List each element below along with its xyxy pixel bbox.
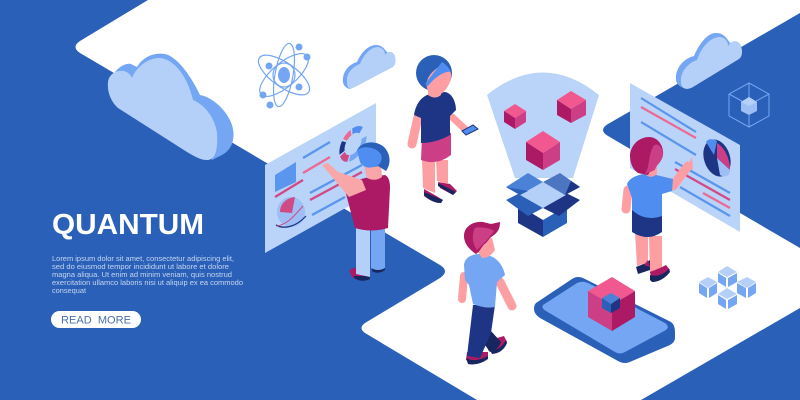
icon: open box [506, 173, 580, 237]
person: woman at right panel [626, 137, 693, 282]
icon: hexagon cube outline [729, 83, 769, 127]
icon: small cloud [343, 45, 396, 89]
text block: body copy: magna aliqua. Ut enim ad minim veniam, quis nostrud [52, 270, 232, 279]
icon: top left cube [504, 104, 526, 129]
icon: phone with cube [534, 277, 675, 363]
person: walking man [462, 222, 512, 364]
icon: large cube [526, 131, 560, 170]
icon: four small cubes [699, 266, 756, 309]
icon: large cloud [108, 54, 234, 160]
chart: planet pie [276, 197, 306, 227]
panel: left holographic chart [265, 103, 376, 253]
person: woman with phone [412, 55, 478, 203]
panel: right holographic chart [630, 83, 740, 232]
icon: right cloud [676, 33, 742, 89]
person: man at left panel [322, 142, 390, 281]
text block: body copy: Lorem ipsum dolor sit amet, consectetur adipiscing elit, [52, 254, 234, 263]
icon: hologram beam with cubes [487, 72, 599, 237]
icon: top right cube [557, 91, 586, 123]
button: read more [51, 311, 141, 328]
button: read more: READ MORE [61, 314, 131, 326]
chart: pie [699, 136, 735, 180]
chart: donut [342, 124, 364, 164]
text block: body copy: exercitation ullamco laboris nisi ut aliquip ex ea commodo [52, 278, 243, 287]
text block: body copy [52, 254, 243, 295]
title: QUANTUM [52, 209, 204, 241]
icon: atom [253, 42, 315, 108]
text block: body copy: consequat [52, 286, 87, 295]
text block: body copy: sed do eiusmod tempor incididunt ut labore et dolore [52, 262, 229, 271]
icon: pink cube on phone [588, 277, 635, 331]
